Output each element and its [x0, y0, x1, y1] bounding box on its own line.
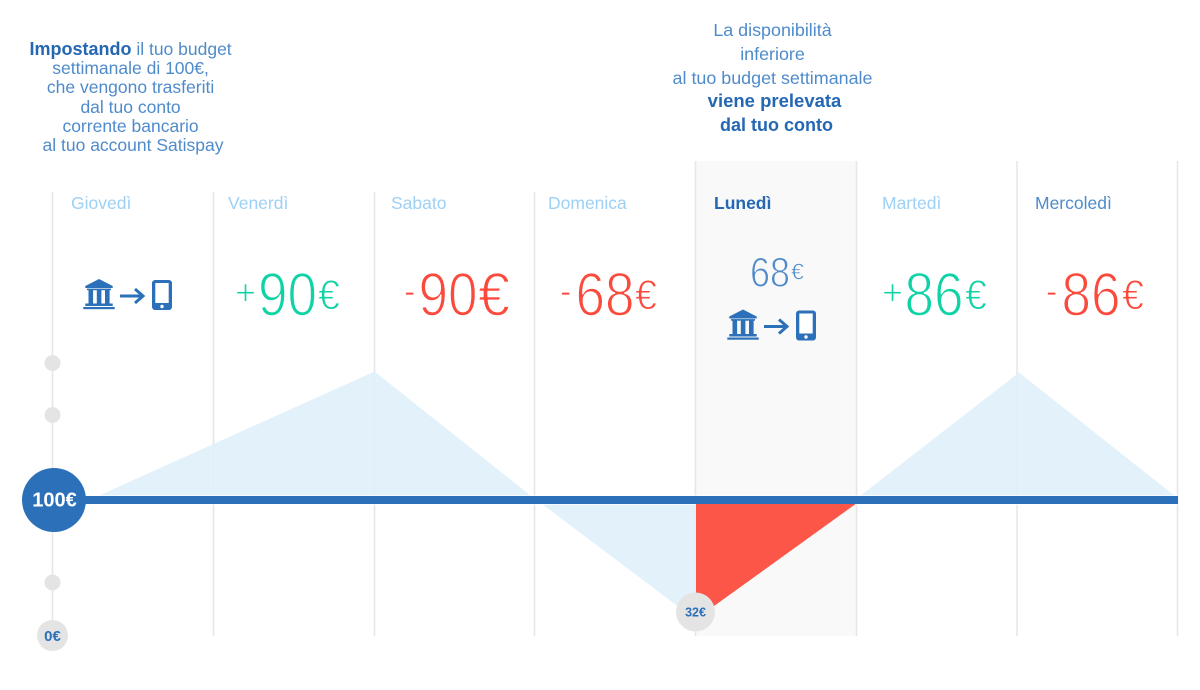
text block: availability note: dal tuo conto	[720, 115, 833, 135]
text block: intro budget note: al tuo account Satispay	[43, 135, 224, 155]
day labels: Martedì	[882, 193, 941, 213]
amount: +86€: 86	[904, 260, 964, 328]
marker: 32€: 32€	[685, 606, 706, 620]
amount: -86€	[1046, 260, 1144, 328]
amount: -90€: 90	[418, 260, 478, 328]
amount: -68€: -	[560, 273, 571, 311]
amount: -86€: 86	[1062, 260, 1120, 328]
amount: +86€: €	[965, 271, 987, 318]
text block: availability note: al tuo budget settimanale	[673, 68, 873, 88]
amount: +90€: €	[318, 271, 340, 318]
marker: 100€	[22, 468, 86, 532]
icon: bank to phone, Monday	[727, 310, 816, 340]
day labels: Giovedì	[71, 193, 131, 213]
text block: availability note: viene prelevata	[708, 90, 842, 111]
amount: -86€: -	[1046, 273, 1057, 311]
icon: bank to phone, Thursday	[83, 279, 172, 310]
chart: balance area	[89, 372, 1175, 620]
text block: availability note: La disponibilità	[713, 20, 832, 40]
amount: 68€: €	[791, 258, 804, 284]
budget line	[60, 496, 1178, 504]
day labels: Sabato	[391, 193, 446, 213]
amount: -68€: 68	[576, 260, 634, 328]
amount: -68€: €	[635, 271, 657, 318]
marker: 0€: 0€	[44, 628, 61, 645]
day labels: Lunedì	[714, 193, 771, 213]
text block: intro budget note: settimanale di 100€,	[52, 58, 209, 78]
text block: intro budget note: Impostando il tuo budget	[29, 39, 232, 59]
amount: -68€	[560, 260, 657, 328]
amount: -86€: €	[1122, 271, 1144, 318]
amount: -90€: €	[478, 260, 510, 328]
amount: -90€	[404, 260, 510, 328]
amount: +90€: +	[235, 272, 256, 312]
column grid lines	[52, 161, 1178, 636]
day labels: Domenica	[548, 193, 627, 213]
amount: +86€: +	[882, 272, 903, 312]
amount: +86€	[882, 260, 987, 328]
day labels: Venerdì	[228, 193, 288, 213]
amount: +90€	[235, 260, 340, 328]
amount: +90€: 90	[258, 260, 317, 328]
axis markers	[44, 355, 60, 590]
marker: 32€	[676, 592, 715, 632]
marker: 0€	[37, 620, 68, 651]
text block: intro budget note: che vengono trasferiti	[47, 77, 214, 97]
amount: 68€: 68	[750, 248, 790, 296]
day labels	[71, 193, 1112, 213]
panel: Lunedì highlight column	[696, 161, 857, 636]
amount: -90€: -	[404, 273, 415, 311]
text block: availability note: inferiore	[740, 44, 805, 64]
chart: overdraft area	[696, 503, 857, 619]
budget line glow	[60, 495, 1178, 505]
text block: intro budget note: dal tuo conto	[80, 97, 181, 117]
marker: 100€: 100€	[32, 490, 77, 512]
day labels: Mercoledì	[1035, 193, 1112, 213]
text block: intro budget note: corrente bancario	[62, 116, 199, 136]
